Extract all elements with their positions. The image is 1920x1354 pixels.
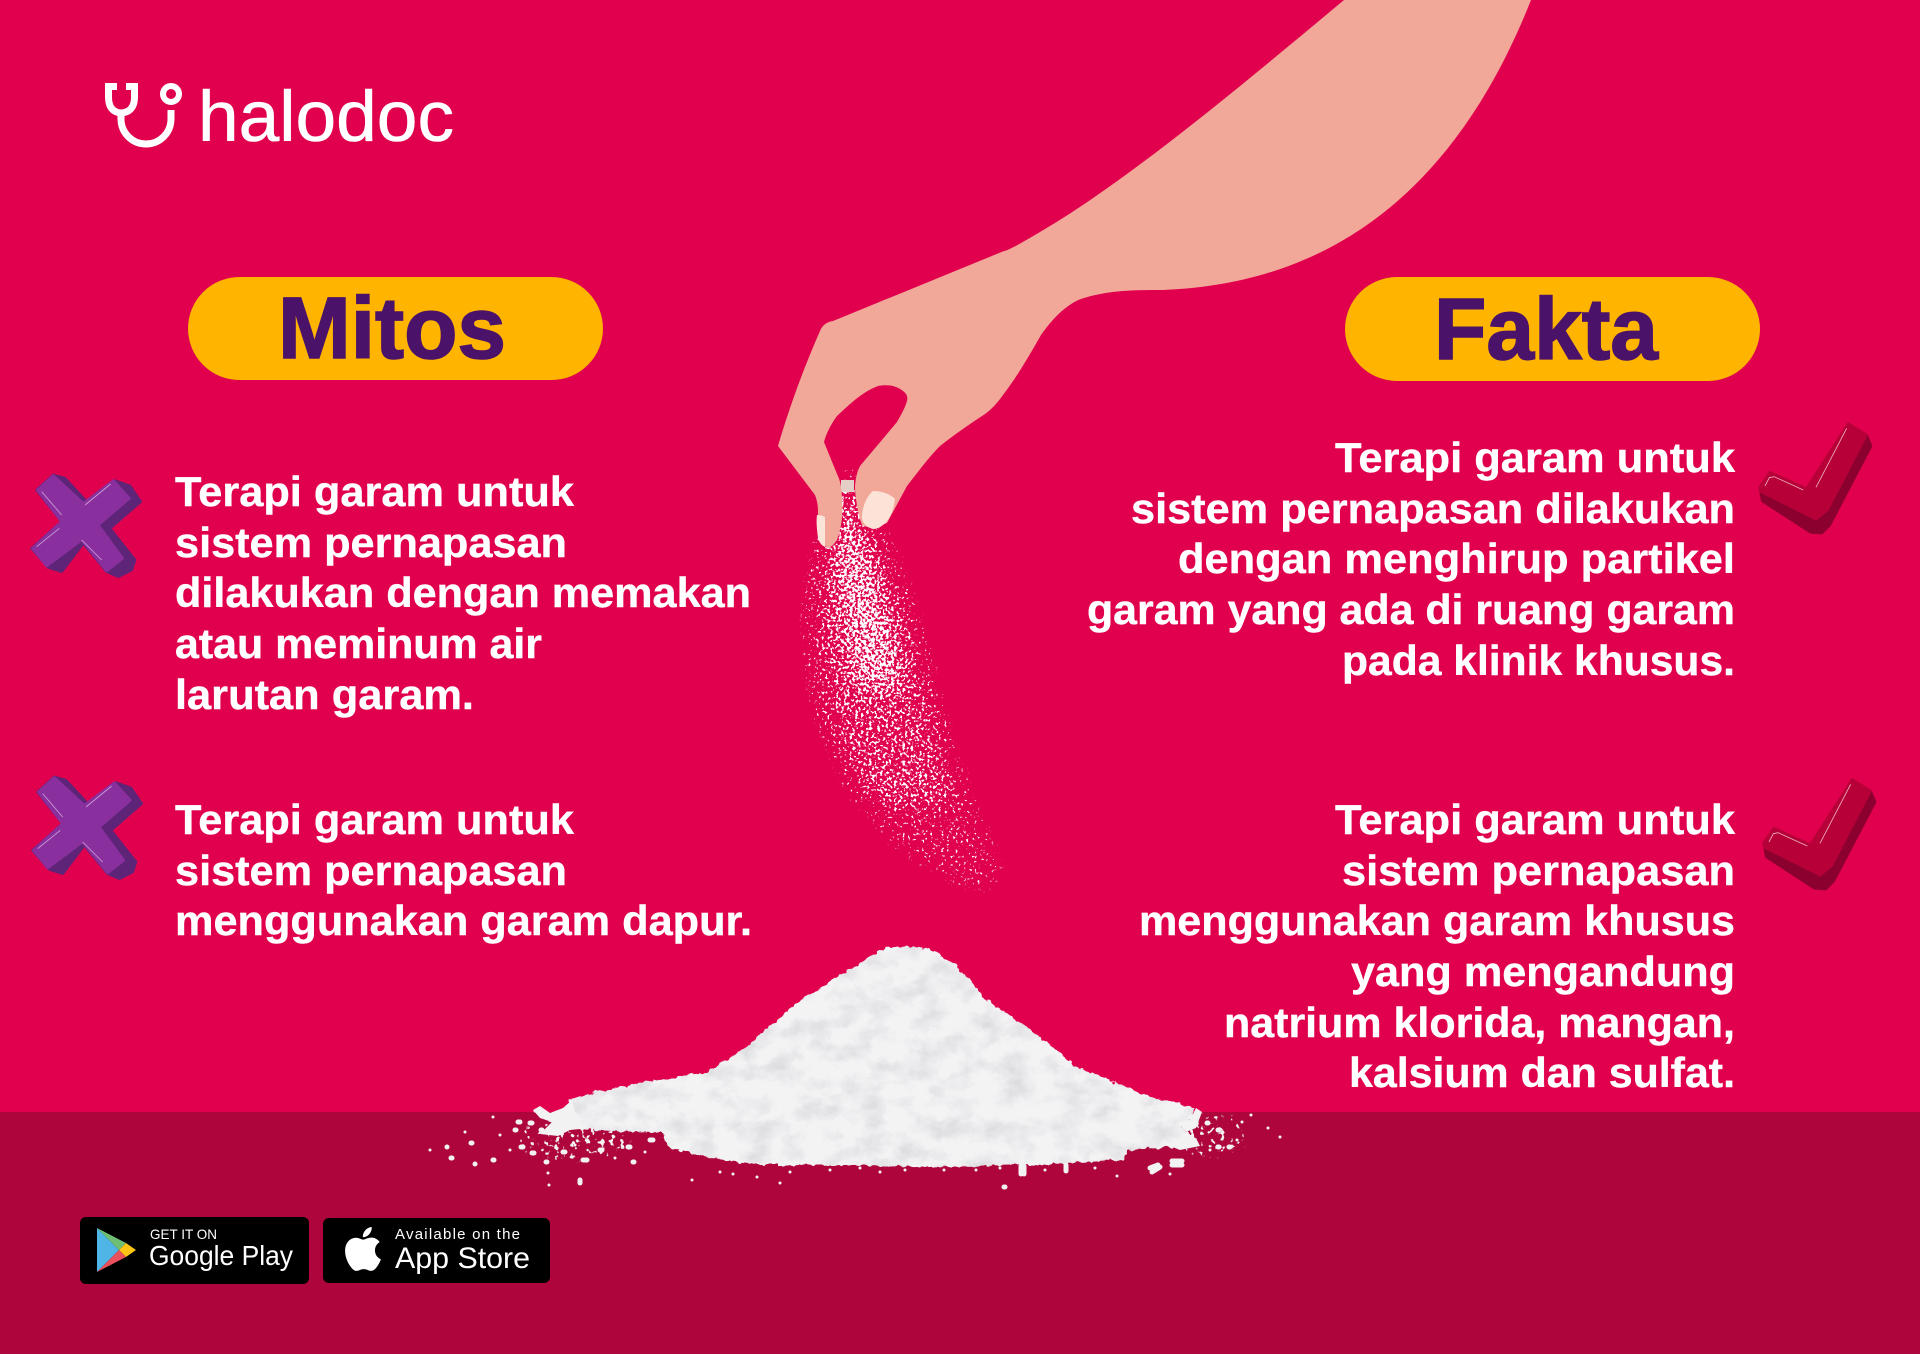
text: fact 2 [1139,796,1736,1096]
text: myth 1 [175,468,751,718]
text: fact 1: dengan menghirup partikel [1178,535,1735,582]
text: myth 2: menggunakan garam dapur. [175,897,752,944]
text: fact 2: yang mengandung [1351,948,1735,995]
text: fact 2: menggunakan garam khusus [1139,897,1735,944]
badge: App Store: Available on the [395,1226,520,1243]
text: fact 2: Terapi garam untuk [1335,796,1736,843]
badge: App Store [323,1218,550,1283]
pill: Mitos heading: Mitos [278,280,506,377]
text: myth 1: sistem pernapasan [175,519,567,566]
text: myth 1: Terapi garam untuk [175,468,575,515]
salt pile [430,930,1280,1187]
text: fact 2: kalsium dan sulfat. [1349,1049,1735,1096]
badge: Google Play: GET IT ON [150,1226,217,1242]
text: myth 1: atau meminum air [175,620,542,667]
logo: halodoc [108,78,454,157]
text: fact 2: sistem pernapasan [1342,847,1735,894]
pill: Fakta heading [1345,277,1760,381]
icon: check 1 [1760,424,1871,533]
text: fact 1: pada klinik khusus. [1342,637,1735,684]
icon: finger nail [817,515,825,547]
text: myth 1: larutan garam. [175,671,474,718]
badge: App Store: App Store [395,1242,530,1275]
text: myth 2: sistem pernapasan [175,847,567,894]
text: fact 1: garam yang ada di ruang garam [1087,586,1735,633]
text: myth 1: dilakukan dengan memakan [175,569,751,616]
salt at the fingertips [841,480,854,492]
icon: check 2 [1764,780,1875,889]
pill: Mitos heading [188,277,603,380]
badge: Google Play: Google Play [149,1240,293,1271]
text: fact 1: Terapi garam untuk [1335,434,1736,481]
icon: apple [345,1227,381,1271]
falling salt stream [815,482,1000,884]
icon: cross 1 [32,475,141,577]
icon: cross 2 [33,777,142,879]
icon: thumb nail [862,491,895,529]
illustration: arm and hand [778,0,1531,548]
floor band [0,1112,1920,1354]
text: fact 1 [1087,434,1736,684]
icon: stethoscope [108,86,179,144]
text: fact 1: sistem pernapasan dilakukan [1131,485,1735,532]
icon: play triangle [97,1228,136,1272]
text: myth 2 [175,796,752,944]
badge: Google Play [80,1217,309,1284]
text: fact 2: natrium klorida, mangan, [1224,999,1735,1046]
logo wordmark: halodoc [198,78,454,157]
text: myth 2: Terapi garam untuk [175,796,575,843]
scattered salt grains [430,1100,1280,1187]
pill: Fakta heading: Fakta [1434,281,1659,378]
